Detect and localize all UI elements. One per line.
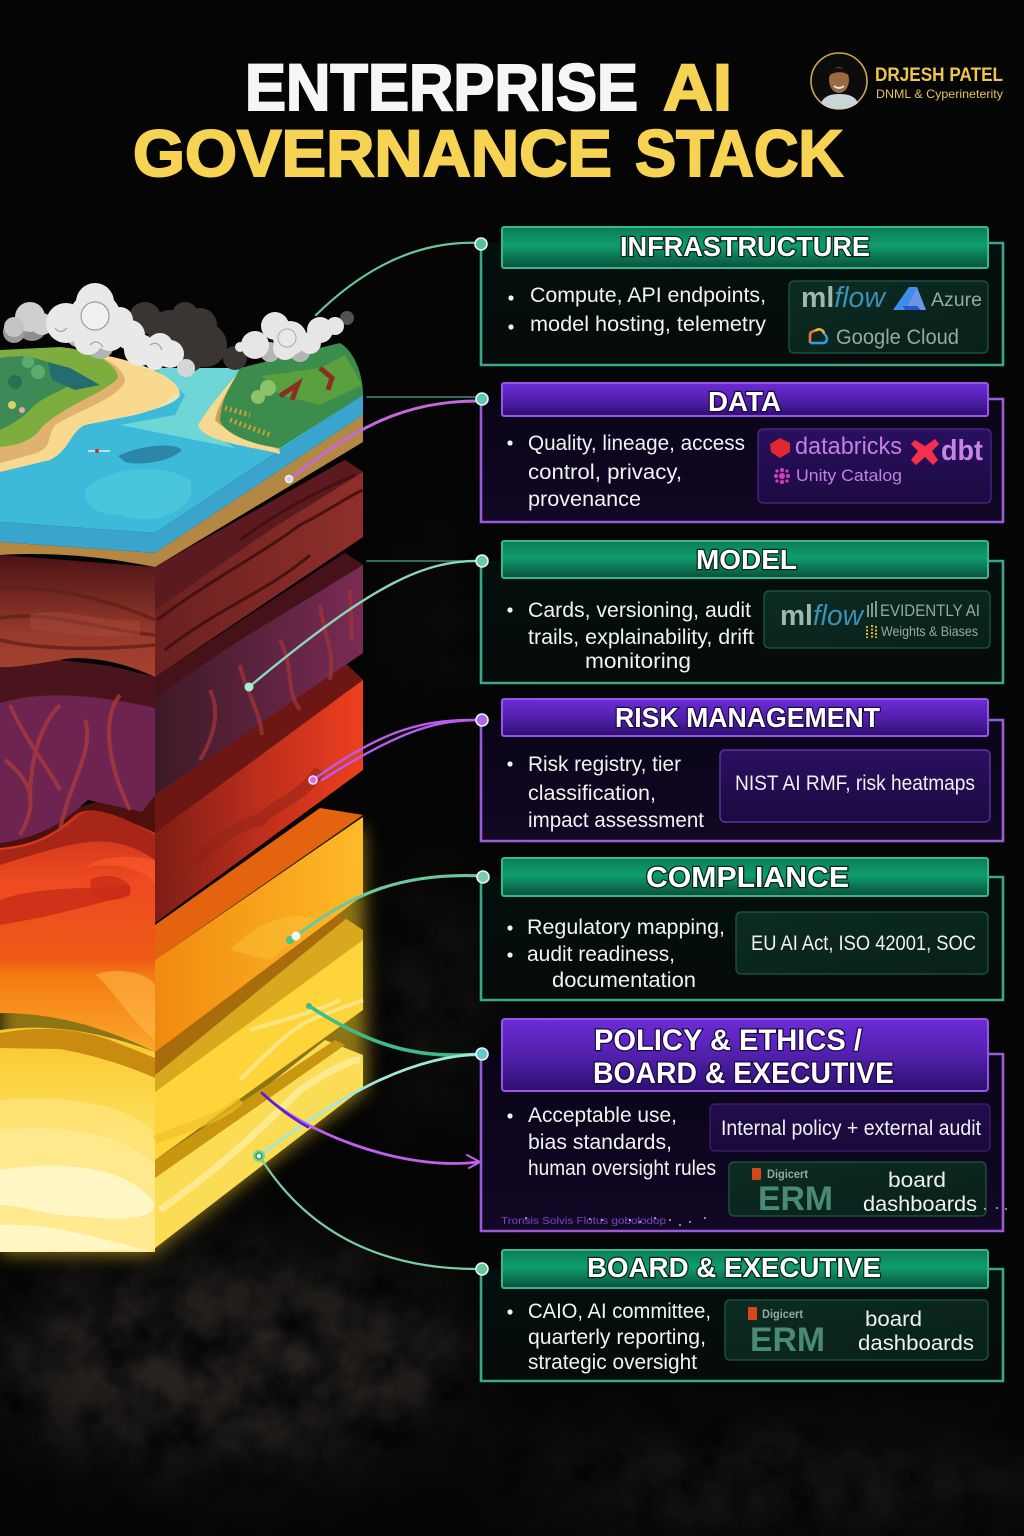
arrow: purple connector into policy panel: [262, 1093, 480, 1168]
connector: data: [290, 397, 481, 479]
heading: [502, 699, 988, 736]
label: board dashboards: dashboards: [863, 1193, 977, 1216]
white cloud left: [3, 302, 53, 343]
layer: core, pale yellow: [0, 1028, 363, 1252]
title: [133, 50, 843, 190]
heading: BOARD & EXECUTIVE: [593, 1057, 894, 1090]
icon: google cloud: [810, 329, 827, 343]
text block: bullets: [507, 432, 745, 511]
label: board dashboards: [858, 1308, 974, 1355]
connector: model: [249, 561, 481, 687]
panel: board and executive: [481, 1250, 1003, 1381]
text block: bullets: Compute, API endpoints,: [530, 284, 766, 307]
icon: digicert: [752, 1168, 761, 1180]
heading: POLICY & ETHICS /: [594, 1024, 863, 1057]
text block: bullets: Quality, lineage, access: [528, 432, 745, 455]
panel: policy and ethics: [481, 1019, 1007, 1231]
tools box: [789, 281, 988, 353]
text block: bullets: quarterly reporting,: [528, 1326, 706, 1349]
panel frame: [481, 877, 1003, 1000]
heading: [502, 1250, 988, 1288]
icon: small boat: [88, 450, 110, 452]
sand edge: [0, 415, 363, 567]
icon: weights and biases: [867, 625, 876, 638]
tools box: [764, 591, 990, 648]
text block: bullets: Acceptable use,: [528, 1104, 677, 1127]
heading: [502, 858, 988, 896]
icon: digicert: [748, 1307, 757, 1320]
text block: bullets: monitoring: [585, 650, 691, 673]
connector: policy blue branch: [259, 1054, 482, 1156]
label: board dashboards: [863, 1169, 977, 1216]
connector end dots: [244, 238, 489, 1275]
panel frame: [481, 561, 1003, 683]
tools box: policy and audit: [710, 1104, 990, 1151]
text block: bullets: [507, 753, 704, 832]
right beach: [198, 368, 280, 454]
tools box: erm: [729, 1162, 986, 1218]
heading: COMPLIANCE: [646, 862, 849, 894]
panel: compliance: [481, 858, 1003, 1000]
tools box: [758, 429, 991, 503]
panel frame: [481, 399, 1003, 522]
title: ENTERPRISE: [245, 50, 638, 124]
panel frame: [481, 243, 1003, 365]
text block: bullets: Risk registry, tier: [528, 753, 681, 776]
panel: model: [481, 541, 1003, 683]
panel nodes: [475, 238, 489, 1275]
heading: MODEL: [696, 544, 797, 575]
background: [0, 928, 1024, 1529]
tools box: policy and audit: Internal policy + external audit: [721, 1117, 981, 1140]
logo: mlflow: mlflow: [780, 600, 865, 632]
icon: author portrait: [811, 53, 867, 109]
layer: lava red: [0, 663, 363, 1052]
text block: bullets: [508, 284, 767, 336]
logo text: digicert: Digicert: [762, 1307, 803, 1321]
text block: bullets: trails, explainability, drift: [528, 626, 754, 649]
tools box: EU AI Act, ISO 42001, SOC: [751, 932, 976, 955]
text block: bullets: [507, 1300, 711, 1374]
heading: DATA: [708, 386, 781, 417]
heading: [502, 541, 988, 578]
text block: bullets: CAIO, AI committee,: [528, 1300, 711, 1323]
tools box: [720, 750, 990, 822]
small garbled footnote: Tronsis Solvis Flotus gobolodop: [501, 1216, 667, 1227]
text block: bullets: [507, 599, 754, 673]
text block: bullets: model hosting, telemetry: [530, 313, 767, 336]
logo text: weights and biases: Weights & Biases: [881, 623, 978, 639]
right island: [220, 343, 363, 448]
clouds: [3, 283, 354, 377]
logo text: digicert: Digicert: [767, 1167, 808, 1181]
logo text: erm: ERM: [750, 1321, 825, 1359]
heading: INFRASTRUCTURE: [620, 231, 870, 262]
text block: bullets: Cards, versioning, audit: [528, 599, 751, 622]
label: board dashboards: board: [865, 1308, 922, 1331]
text block: bullets: bias standards,: [528, 1131, 672, 1154]
left beach: [0, 350, 180, 472]
logo text: erm: ERM: [758, 1180, 833, 1218]
panel: risk management: [481, 699, 1003, 841]
author badge: [811, 53, 1003, 109]
heading: BOARD & EXECUTIVE: [587, 1252, 881, 1283]
glow behind molten layers: [0, 825, 366, 1254]
connector: compliance: [296, 876, 483, 936]
panel: data: [481, 383, 1003, 522]
author role: DNML & Cyperineterity: [876, 87, 1003, 101]
text block: bullets: strategic oversight: [528, 1351, 697, 1374]
connector lines: [249, 243, 483, 1269]
text block: bullets: impact assessment: [528, 809, 704, 832]
layer: surface with water and land: [0, 343, 363, 567]
white cloud main: [46, 283, 195, 377]
panel: infrastructure: [481, 227, 1003, 365]
icon: databricks: [770, 438, 790, 458]
tools box: NIST AI RMF, risk heatmaps: [735, 772, 975, 795]
icon: dbt: [912, 440, 938, 464]
logo text: evidently ai: EVIDENTLY AI: [880, 601, 980, 620]
text block: bullets: documentation: [552, 969, 696, 992]
title: STACK: [635, 116, 843, 190]
logo text: google cloud: Google Cloud: [836, 326, 959, 349]
label: board dashboards: dashboards: [858, 1332, 974, 1355]
layer: purple mantle: [0, 553, 363, 843]
panel frame: [481, 1054, 1003, 1231]
icon: evidently bars: [868, 601, 876, 617]
title: AI: [663, 50, 732, 124]
connector: policy green branch: [309, 1006, 482, 1055]
text block: bullets: [507, 1104, 716, 1180]
text block: bullets: classification,: [528, 782, 656, 805]
text block: bullets: audit readiness,: [527, 943, 675, 966]
panel frame: [481, 1269, 1003, 1381]
left island: [0, 347, 118, 447]
layer: brown crust: [0, 460, 363, 677]
icon: azure: [893, 287, 926, 310]
connector: board and executive: [262, 1160, 481, 1269]
earth strata stack illustration: [0, 283, 366, 1254]
water side wall: [0, 395, 363, 553]
heading: RISK MANAGEMENT: [615, 702, 880, 733]
logo text: unity catalog: Unity Catalog: [796, 466, 902, 485]
heading: [502, 227, 988, 268]
logo: mlflow: mlflow: [801, 282, 887, 314]
stack anchor dots: [244, 476, 317, 1162]
tools box: [736, 912, 988, 974]
author name: DRJESH PATEL: [875, 65, 1003, 86]
connector: infrastructure: [316, 243, 481, 315]
connector: risk management: [313, 720, 481, 780]
water surface: [0, 368, 363, 533]
dark smoke: [129, 302, 247, 372]
heading: [502, 383, 988, 417]
logo text: azure: Azure: [931, 290, 982, 311]
heading: [502, 1019, 988, 1091]
text block: bullets: human oversight rules: [528, 1157, 716, 1180]
logo text: databricks: databricks: [795, 433, 902, 460]
label: board dashboards: board: [888, 1169, 946, 1192]
text block: bullets: provenance: [528, 488, 641, 511]
text block: bullets: [507, 916, 725, 992]
icon: unity catalog: [774, 468, 790, 484]
logo text: dbt: dbt: [941, 435, 983, 467]
layer: amber: [155, 808, 363, 1075]
layer: yellow: [155, 918, 363, 1160]
panel frame: [481, 720, 1003, 841]
white cloud right: [235, 311, 354, 362]
title: GOVERNANCE: [133, 116, 612, 190]
tools box: erm: [725, 1300, 988, 1360]
text block: bullets: control, privacy,: [528, 461, 682, 484]
text block: bullets: Regulatory mapping,: [527, 916, 725, 939]
